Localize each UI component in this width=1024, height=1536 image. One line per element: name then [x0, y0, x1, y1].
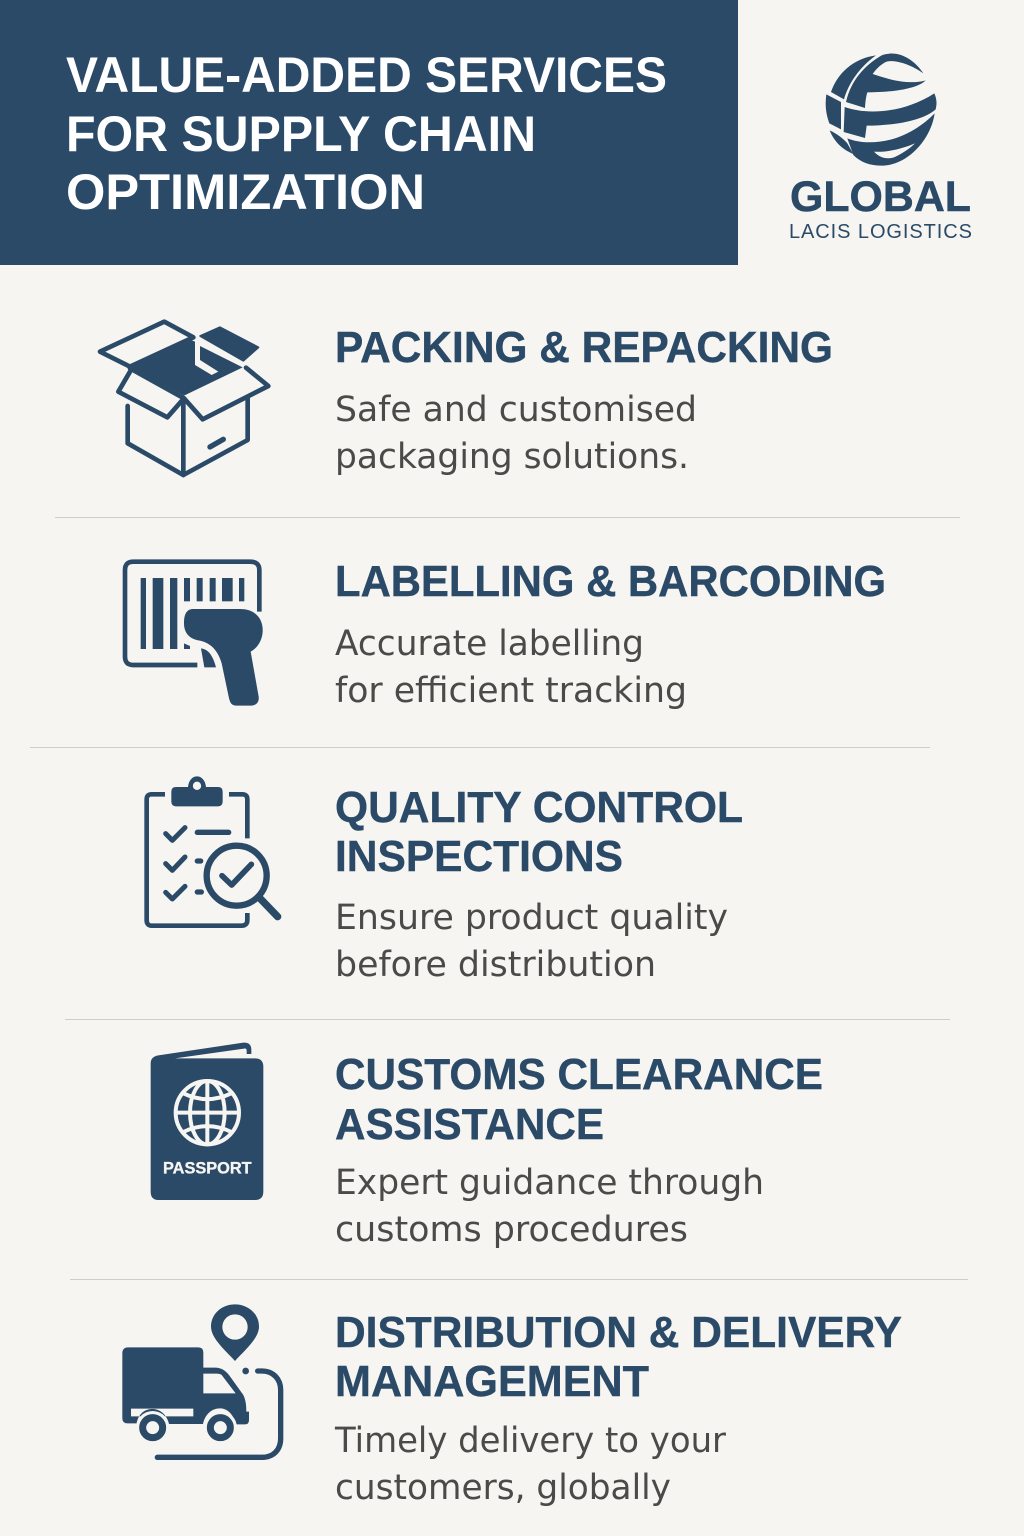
- description: Safe and customised: [335, 390, 697, 430]
- heading: [335, 783, 743, 881]
- title: VALUE-ADDED SERVICES: [66, 47, 667, 103]
- description: before distribution: [335, 945, 656, 985]
- description: [335, 390, 697, 477]
- description: Timely delivery to your: [334, 1421, 727, 1461]
- icon: barcode scanner: [125, 562, 263, 706]
- logo: [789, 54, 972, 243]
- description: Expert guidance through: [335, 1163, 764, 1203]
- heading: ASSISTANCE: [335, 1100, 604, 1149]
- icon: delivery truck with route: [122, 1304, 281, 1457]
- heading: PACKING & REPACKING: [335, 323, 833, 372]
- description: customs procedures: [335, 1210, 688, 1250]
- description: packaging solutions.: [335, 437, 689, 477]
- description: Ensure product quality: [335, 898, 728, 938]
- heading: DISTRIBUTION & DELIVERY: [335, 1308, 902, 1357]
- description: [335, 624, 687, 711]
- heading: LABELLING & BARCODING: [335, 557, 886, 606]
- heading: [335, 1308, 902, 1406]
- description: customers, globally: [335, 1468, 671, 1508]
- icon: globe: [826, 54, 937, 166]
- icon: clipboard with magnifier: [147, 776, 278, 926]
- service: labelling: [125, 557, 886, 711]
- icon: open box: [100, 322, 268, 475]
- description: [335, 1163, 764, 1250]
- heading: INSPECTIONS: [335, 832, 623, 881]
- service: distribution: [122, 1304, 902, 1508]
- title: FOR SUPPLY CHAIN: [66, 106, 536, 162]
- passport label: PASSPORT: [163, 1158, 252, 1177]
- description: for efficient tracking: [335, 671, 687, 711]
- service: customs: [151, 1043, 823, 1250]
- description: Accurate labelling: [335, 624, 644, 664]
- heading: MANAGEMENT: [335, 1357, 649, 1406]
- description: [334, 1421, 727, 1508]
- icon: passport: [151, 1043, 263, 1200]
- service: packing: [100, 322, 833, 477]
- heading: [335, 1050, 823, 1149]
- title: OPTIMIZATION: [66, 164, 425, 220]
- heading: QUALITY CONTROL: [335, 783, 743, 832]
- header banner: [0, 0, 738, 265]
- heading: CUSTOMS CLEARANCE: [335, 1050, 823, 1099]
- service: quality control: [147, 776, 743, 985]
- title: [66, 47, 667, 220]
- logo subtitle: LACIS LOGISTICS: [789, 221, 972, 243]
- description: [335, 898, 728, 985]
- logo wordmark: GLOBAL: [790, 173, 971, 221]
